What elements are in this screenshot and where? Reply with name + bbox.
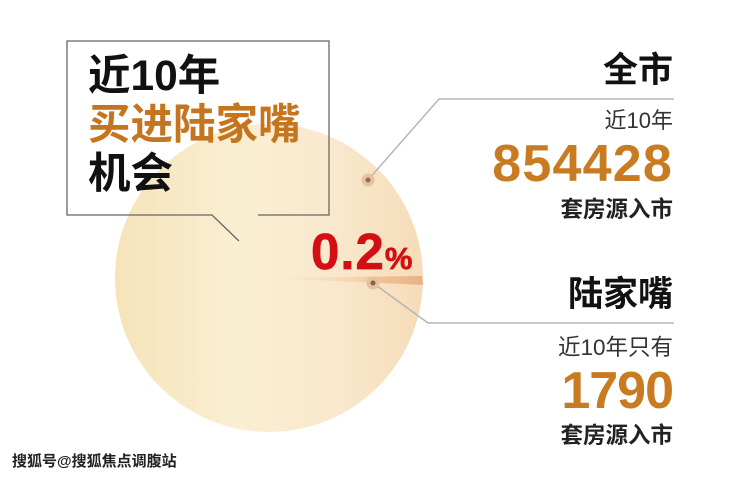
number: 1790: 1790 <box>561 362 673 420</box>
callout title <box>88 53 301 198</box>
callout title: 近10年 <box>88 53 220 100</box>
watermark: 搜狐号@搜狐焦点调腹站 <box>12 453 177 470</box>
number: 854428: 854428 <box>492 135 673 193</box>
label: listings on the market: 套房源入市 <box>560 197 673 222</box>
percentage callout: 0.2% <box>311 223 412 280</box>
label: listings on the market: 套房源入市 <box>560 423 673 448</box>
label: last 10 years: 近10年 <box>605 108 673 133</box>
pie slice: 0.2% <box>272 276 423 285</box>
heading: Lujiazui: 陆家嘴 <box>568 275 673 314</box>
callout title: 买进陆家嘴 <box>88 102 301 149</box>
heading: whole city: 全市 <box>603 51 673 90</box>
callout title: 机会 <box>88 151 173 198</box>
label: only in last 10 years: 近10年只有 <box>558 335 673 360</box>
